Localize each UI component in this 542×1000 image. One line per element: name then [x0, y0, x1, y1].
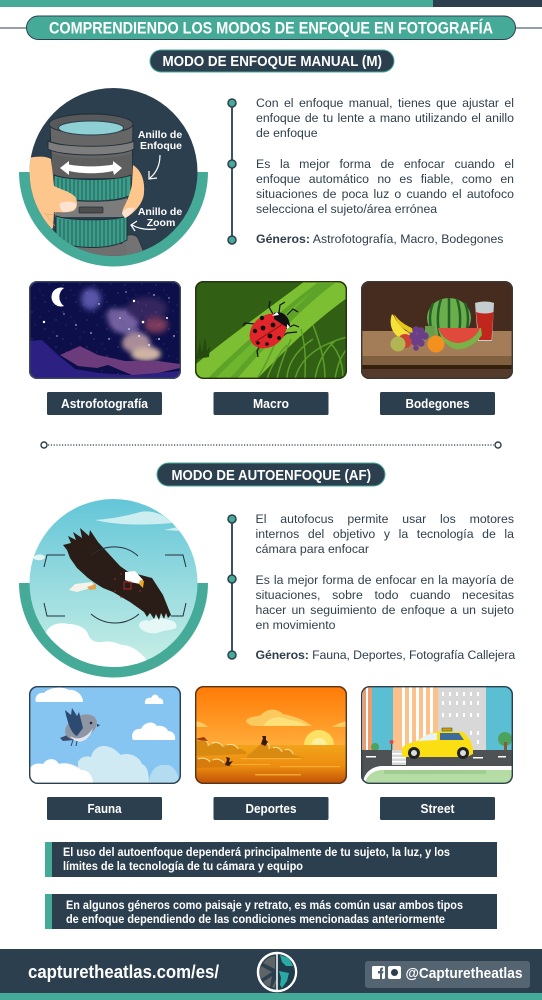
label: Deportes: Deportes: [246, 802, 297, 816]
label: Street: [380, 797, 495, 820]
illustration: hands adjusting lens: [19, 88, 208, 266]
label: Astrofotografía: [47, 392, 162, 415]
text: manual focus description: Con el enfoque manual, tienes que ajustar el: [256, 96, 514, 110]
footer website: capturetheatlas.com/es/: [28, 961, 219, 982]
label: Macro: Macro: [253, 397, 289, 411]
text: manual focus description: situaciones de poca luz o cuando el autofoco: [256, 187, 514, 201]
heading: autofocus: MODO DE AUTOENFOQUE (AF): [172, 468, 371, 484]
label: Fauna: [47, 797, 162, 820]
text: autofocus description: [256, 512, 516, 662]
illustration: hands adjusting lens: Anillo de: [138, 129, 182, 141]
text: autofocus description: cámara para enfocar: [256, 542, 369, 556]
callout: both focus modes: de enfoque dependiendo de las condiciones mencionadas anteriormente: [66, 914, 445, 926]
text: autofocus description: Es la mejor forma de enfocar en la mayoría de: [256, 573, 514, 587]
text: manual focus description: enfoque de tu lente a mano utilizando el anillo: [256, 111, 514, 125]
timeline: manual focus: [228, 99, 236, 244]
text: manual focus description: Géneros: Astrofotografía, Macro, Bodegones: [256, 232, 503, 246]
callout: autofocus dependency: [45, 842, 497, 877]
heading: manual focus: [150, 50, 394, 72]
photo: astrophotography: [29, 281, 181, 379]
heading: manual focus: MODO DE ENFOQUE MANUAL (M): [162, 54, 382, 70]
illustration: eagle in autofocus viewfinder: [19, 499, 208, 678]
text: manual focus description: selecciona el sujeto/área errónea: [256, 202, 437, 216]
text: manual focus description: enfoque automático no es fiable, como en: [256, 172, 514, 186]
photo: bird in the sky: [29, 686, 181, 784]
callout: autofocus dependency: El uso del autoenfoque dependerá principalmente de tu sujeto, la luz, y los: [63, 847, 450, 859]
illustration: hands adjusting lens: Zoom: [147, 217, 175, 229]
label: Bodegones: [380, 392, 495, 415]
text: manual focus description: Es la mejor forma de enfocar cuando el: [256, 157, 514, 171]
photo: still life fruit: [361, 281, 513, 379]
illustration: hands adjusting lens: Enfoque: [140, 140, 182, 152]
text: autofocus description: en movimiento: [256, 618, 335, 632]
social handle: @Capturetheatlas: [406, 965, 522, 982]
callout: both focus modes: En algunos géneros como paisaje y retrato, es más común usar ambos tipos: [66, 900, 463, 912]
section divider: [41, 442, 501, 448]
text: autofocus description: El autofocus permite usar los motores: [256, 512, 514, 526]
text: autofocus description: Géneros: Fauna, Deportes, Fotografía Callejera: [256, 648, 515, 662]
top colour bar: [0, 0, 542, 7]
timeline: autofocus: [228, 515, 236, 659]
callout: autofocus dependency: límites de la tecnología de tu cámara y equipo: [63, 861, 303, 873]
photo: macro ladybug: [195, 281, 347, 379]
text: autofocus description: internos del objetivo y la tecnología de la: [256, 527, 514, 541]
label: Bodegones: Bodegones: [406, 397, 470, 411]
label: Fauna: Fauna: [88, 802, 122, 816]
social handle: [365, 961, 530, 988]
heading: autofocus: [157, 463, 385, 486]
text: manual focus description: [256, 96, 514, 246]
label: Street: Street: [420, 802, 455, 816]
illustration: hands adjusting lens: Anillo de: [138, 206, 182, 218]
title banner: [0, 16, 542, 40]
photo: street with taxi: [361, 686, 513, 784]
text: autofocus description: situaciones, sobre todo cuando necesitas: [256, 588, 514, 602]
photo: surfers at sunset: [195, 686, 347, 784]
footer: [0, 949, 542, 1000]
label: Macro: [214, 392, 328, 415]
label: Deportes: [214, 797, 328, 820]
callout: both focus modes: [45, 894, 497, 929]
text: manual focus description: de enfoque: [256, 126, 318, 140]
logo: aperture and globe: [258, 953, 296, 991]
label: Astrofotografía: Astrofotografía: [61, 397, 149, 411]
text: autofocus description: hacer un seguimiento de enfoque a un sujeto: [256, 603, 514, 617]
